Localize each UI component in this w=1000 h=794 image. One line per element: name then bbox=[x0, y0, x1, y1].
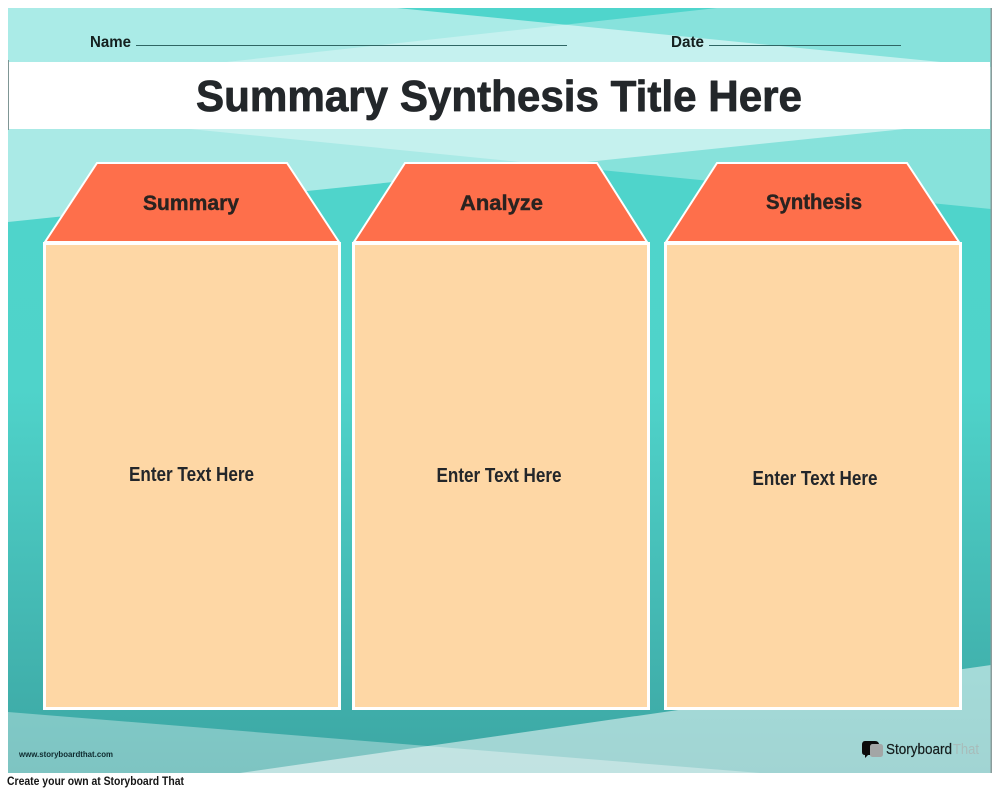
body: summary: Enter Text Here bbox=[129, 464, 254, 486]
body: analyze: Enter Text Here bbox=[436, 465, 562, 487]
header: synthesis: Synthesis bbox=[766, 191, 862, 214]
title band bbox=[9, 62, 990, 129]
body: synthesis: Enter Text Here bbox=[752, 468, 878, 490]
website url: www.storyboardthat.com bbox=[18, 749, 113, 759]
header: summary bbox=[45, 163, 339, 242]
logo: Storyboard bbox=[886, 742, 952, 758]
body: summary bbox=[44, 244, 340, 708]
body: analyze bbox=[354, 244, 648, 708]
panel: analyze bbox=[354, 163, 648, 708]
panel: synthesis bbox=[666, 163, 960, 708]
icon: speech bubbles bbox=[862, 741, 883, 758]
name field: Name bbox=[90, 34, 131, 51]
header: synthesis bbox=[666, 163, 959, 242]
logo bbox=[862, 741, 979, 758]
header: summary: Summary bbox=[143, 192, 239, 215]
header: analyze bbox=[354, 163, 647, 242]
body: synthesis bbox=[666, 244, 960, 708]
footer credit: Create your own at Storyboard That bbox=[7, 774, 184, 788]
date field: Date bbox=[671, 34, 704, 51]
panel: summary bbox=[44, 163, 340, 708]
header: analyze: Analyze bbox=[460, 192, 543, 215]
title: Summary Synthesis Title Here bbox=[196, 72, 802, 121]
logo: That bbox=[953, 742, 979, 758]
